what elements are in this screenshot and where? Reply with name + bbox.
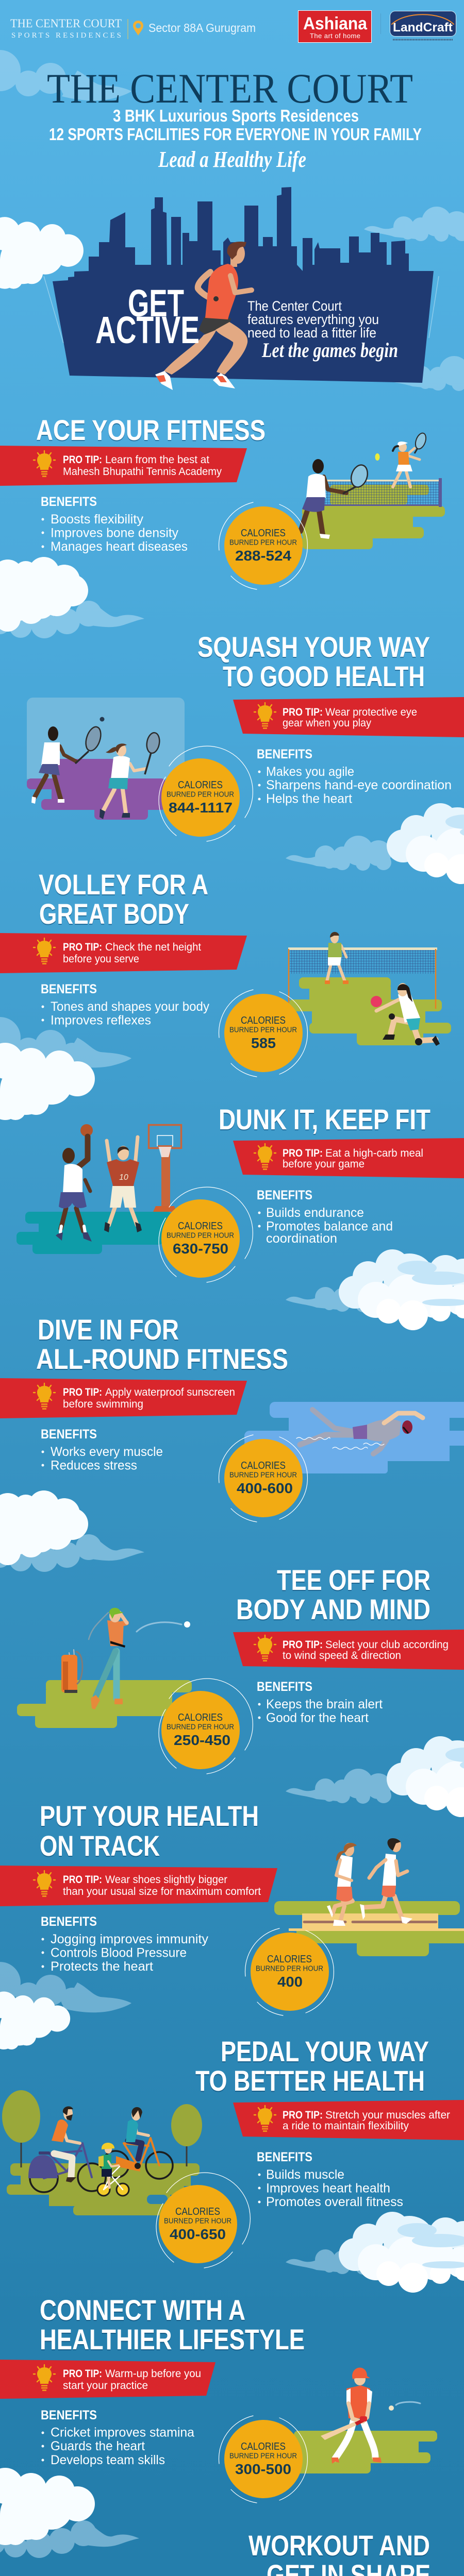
- benefits: Guards the heart: [51, 2439, 145, 2453]
- heading: [236, 1564, 430, 1625]
- pro tip banner: [233, 697, 464, 737]
- benefits: BENEFITS: [41, 982, 97, 996]
- illustration: basketball players and hoop: 10: [119, 1173, 128, 1182]
- panel: golf: [17, 1564, 464, 1774]
- pro tip banner: [0, 2360, 216, 2399]
- pro tip banner: PRO TIP:: [283, 1639, 323, 1651]
- benefits: BENEFITS: [41, 495, 97, 509]
- location text: Sector 88A Gurugram: [148, 21, 256, 35]
- calories badge: 288-524: [235, 548, 291, 564]
- benefits: Jogging improves immunity: [51, 1932, 208, 1946]
- calories badge: [219, 990, 307, 1077]
- illustration: family cycling in park: [2, 2090, 202, 2215]
- pro tip banner: PRO TIP:: [283, 2109, 323, 2121]
- benefits: BENEFITS: [41, 2408, 97, 2422]
- pro tip banner: Select your club according: [325, 1639, 449, 1651]
- panel: cricket: [0, 2294, 437, 2503]
- pro tip banner: Wear shoes slightly bigger: [105, 1874, 227, 1886]
- panel: get active hero: [44, 187, 439, 390]
- pro tip banner: before swimming: [63, 1398, 143, 1410]
- benefits: Helps the heart: [266, 791, 352, 806]
- calories badge: BURNED PER HOUR: [256, 1964, 323, 1973]
- heading: VOLLEY FOR A: [39, 868, 208, 901]
- benefits: Cricket improves stamina: [51, 2426, 194, 2440]
- intro text: [247, 298, 398, 362]
- pro tip banner: [233, 2100, 464, 2140]
- benefits: Boosts flexibility: [51, 512, 143, 527]
- calories badge: [156, 2173, 250, 2268]
- title: THE CENTER COURT: [47, 65, 413, 112]
- benefits: Keeps the brain alert: [266, 1697, 383, 1711]
- illustration: volleyball players and net: [288, 932, 451, 1046]
- calories badge: BURNED PER HOUR: [164, 2216, 231, 2226]
- calories badge: [245, 1928, 334, 2015]
- calories badge: CALORIES: [178, 1712, 223, 1723]
- benefits: BENEFITS: [257, 1680, 312, 1694]
- heading: CONNECT WITH A: [40, 2294, 245, 2326]
- illustration: basketball players and hoop: [16, 1124, 181, 1254]
- calories badge: CALORIES: [178, 779, 223, 791]
- illustration: swimmer in pool: [244, 1402, 464, 1473]
- benefits: [257, 747, 452, 806]
- calories badge: CALORIES: [241, 2441, 286, 2452]
- calories badge: 400: [277, 1974, 303, 1990]
- pro tip banner: PRO TIP:: [63, 941, 102, 953]
- calories badge: 400-650: [170, 2226, 226, 2242]
- calories badge: BURNED PER HOUR: [167, 1723, 234, 1731]
- pro tip banner: PRO TIP:: [283, 1147, 323, 1159]
- benefits: [41, 1427, 163, 1472]
- calories badge: [159, 746, 253, 841]
- heading: get active: ACTIVE: [95, 309, 200, 351]
- pro tip banner: Wear protective eye: [325, 706, 417, 718]
- pro tip banner: Apply waterproof sunscreen: [105, 1386, 235, 1398]
- heading: ALL-ROUND FITNESS: [36, 1343, 288, 1375]
- heading: [195, 2035, 429, 2097]
- calories badge: [219, 502, 307, 589]
- panel: squash: [27, 631, 464, 841]
- calories badge: BURNED PER HOUR: [167, 790, 234, 799]
- calories badge: [219, 2416, 307, 2503]
- heading: [40, 1800, 259, 1862]
- panel: basketball: [16, 1103, 464, 1282]
- benefits: [41, 1914, 208, 1974]
- pro tip banner: than your usual size for maximum comfort: [63, 1886, 261, 1897]
- project logo: [10, 17, 122, 40]
- panel: volleyball: [0, 868, 451, 1077]
- heading: HEALTHIER LIFESTYLE: [40, 2323, 305, 2355]
- benefits: Develops team skills: [51, 2453, 165, 2467]
- logo: Ashiana: [298, 10, 371, 42]
- heading: BODY AND MIND: [236, 1593, 430, 1625]
- intro text: Let the games begin: [261, 338, 398, 362]
- calories badge: 250-450: [174, 1732, 230, 1748]
- pro tip banner: Warm-up before you: [105, 2368, 201, 2380]
- benefits: BENEFITS: [257, 747, 312, 761]
- benefits: [257, 2150, 403, 2209]
- panel: cycling: [2, 2035, 464, 2268]
- intro text: The Center Court: [247, 298, 342, 314]
- pro tip banner: PRO TIP:: [63, 454, 102, 466]
- calories badge: [159, 1187, 253, 1282]
- pro tip banner: a ride to maintain flexibility: [283, 2120, 409, 2132]
- heading: ON TRACK: [40, 1829, 160, 1862]
- pro tip banner: [0, 446, 247, 486]
- heading: WORKOUT AND: [248, 2529, 430, 2562]
- illustration: two joggers on track: [274, 1838, 464, 1956]
- calories badge: BURNED PER HOUR: [229, 538, 297, 547]
- pro tip banner: [0, 1378, 247, 1418]
- benefits: [257, 1680, 383, 1725]
- intro text: need to lead a fitter life: [247, 325, 376, 341]
- pro tip banner: [0, 1866, 277, 1906]
- benefits: Sharpens hand-eye coordination: [266, 778, 452, 792]
- benefits: [41, 982, 209, 1027]
- heading: ACE YOUR FITNESS: [36, 414, 266, 446]
- heading: [36, 1313, 288, 1375]
- pro tip banner: before you serve: [63, 953, 139, 965]
- logo: Ashiana: Ashiana: [303, 14, 368, 33]
- heading: PUT YOUR HEALTH: [40, 1800, 259, 1832]
- panel: jogging: [0, 1800, 464, 2015]
- calories badge: CALORIES: [175, 2206, 220, 2217]
- heading: GREAT BODY: [39, 897, 189, 930]
- benefits: [257, 1188, 393, 1246]
- benefits: [41, 2408, 194, 2467]
- heading: [40, 2294, 305, 2355]
- calories badge: BURNED PER HOUR: [167, 1231, 234, 1240]
- benefits: [41, 495, 188, 554]
- illustration: golfer and bag: [17, 1608, 192, 1728]
- benefits: Improves bone density: [51, 526, 178, 540]
- calories badge: CALORIES: [241, 528, 286, 539]
- calories badge: 630-750: [173, 1241, 228, 1257]
- calories badge: CALORIES: [241, 1015, 286, 1026]
- pro tip banner: [233, 1630, 464, 1670]
- heading: get active: GET: [128, 282, 184, 325]
- heading: DIVE IN FOR: [38, 1313, 179, 1346]
- benefits: Good for the heart: [266, 1710, 369, 1725]
- heading: TEE OFF FOR: [277, 1564, 430, 1596]
- illustration: tennis players and court: [301, 432, 445, 549]
- pro tip banner: [233, 1138, 464, 1178]
- benefits: Builds endurance: [266, 1206, 364, 1220]
- subtitle: 3 BHK Luxurious Sports Residences: [113, 106, 359, 125]
- pro tip banner: PRO TIP:: [63, 1386, 102, 1398]
- calories badge: CALORIES: [241, 1460, 286, 1471]
- pro tip banner: Mahesh Bhupathi Tennis Academy: [63, 466, 222, 478]
- benefits: BENEFITS: [257, 1188, 312, 1202]
- benefits: Tones and shapes your body: [51, 999, 209, 1014]
- pro tip banner: Stretch your muscles after: [325, 2109, 450, 2121]
- pro tip banner: to wind speed & direction: [283, 1650, 401, 1662]
- benefits: coordination: [266, 1231, 337, 1246]
- benefits: Reduces stress: [51, 1458, 137, 1472]
- heading: [248, 2529, 430, 2576]
- calories badge: CALORIES: [178, 1221, 223, 1232]
- pro tip banner: PRO TIP:: [63, 1874, 102, 1886]
- calories badge: [159, 1679, 253, 1774]
- pro tip banner: Check the net height: [105, 941, 201, 953]
- benefits: Promotes overall fitness: [266, 2195, 403, 2209]
- calories badge: 844-1117: [169, 800, 233, 816]
- benefits: Controls Blood Pressure: [51, 1945, 187, 1960]
- pro tip banner: Eat a high-carb meal: [325, 1147, 423, 1159]
- heading: get active: [95, 282, 200, 351]
- pro tip banner: before your game: [283, 1158, 364, 1170]
- benefits: Manages heart diseases: [51, 539, 188, 554]
- pro tip banner: [0, 933, 247, 973]
- logo: LandCraft: LandCraft: [393, 21, 453, 35]
- benefits: Improves heart health: [266, 2181, 390, 2196]
- title block: [47, 65, 422, 172]
- calories badge: 400-600: [237, 1480, 293, 1496]
- header bar: [10, 10, 456, 42]
- project logo: THE CENTER COURT: [10, 17, 122, 30]
- pro tip banner: Learn from the best at: [105, 454, 209, 466]
- icon: location pin: [133, 21, 143, 36]
- benefits: Promotes balance and: [266, 1219, 393, 1233]
- logo: Ashiana: The art of home: [310, 32, 360, 40]
- benefits: Improves reflexes: [51, 1013, 151, 1027]
- pro tip banner: start your practice: [63, 2380, 148, 2392]
- calories badge: CALORIES: [267, 1954, 312, 1965]
- illustration: squash court and players: [27, 698, 185, 820]
- runner illustration: [155, 242, 252, 390]
- benefits: BENEFITS: [41, 1914, 97, 1929]
- pro tip banner: PRO TIP:: [283, 706, 323, 718]
- city skyline panel: [53, 187, 434, 383]
- tagline: Lead a Healthy Life: [158, 147, 306, 172]
- calories badge: BURNED PER HOUR: [229, 1025, 297, 1035]
- pro tip banner: PRO TIP:: [63, 2368, 102, 2380]
- calories badge: 300-500: [235, 2461, 291, 2477]
- benefits: BENEFITS: [41, 1427, 97, 1442]
- panel: tennis: [0, 414, 445, 589]
- logo: LandCraft: [390, 11, 456, 40]
- benefits: BENEFITS: [257, 2150, 312, 2164]
- calories badge: BURNED PER HOUR: [229, 1470, 297, 1480]
- illustration: batsman on pitch: [294, 2368, 437, 2473]
- benefits: Builds muscle: [266, 2167, 344, 2182]
- benefits: Protects the heart: [51, 1959, 153, 1974]
- benefits: Makes you agile: [266, 765, 354, 779]
- panel: swimming: [0, 1313, 464, 1522]
- calories badge: BURNED PER HOUR: [229, 2451, 297, 2461]
- calories badge: 585: [251, 1035, 276, 1051]
- heading: [197, 631, 430, 692]
- pro tip banner: gear when you play: [283, 717, 371, 729]
- intro text: features everything you: [247, 312, 379, 327]
- heading: [39, 868, 208, 930]
- panel: gym: [5, 2529, 464, 2576]
- project logo: SPORTS RESIDENCES: [11, 31, 121, 40]
- benefits: Works every muscle: [51, 1445, 163, 1459]
- calories badge: [219, 1435, 307, 1522]
